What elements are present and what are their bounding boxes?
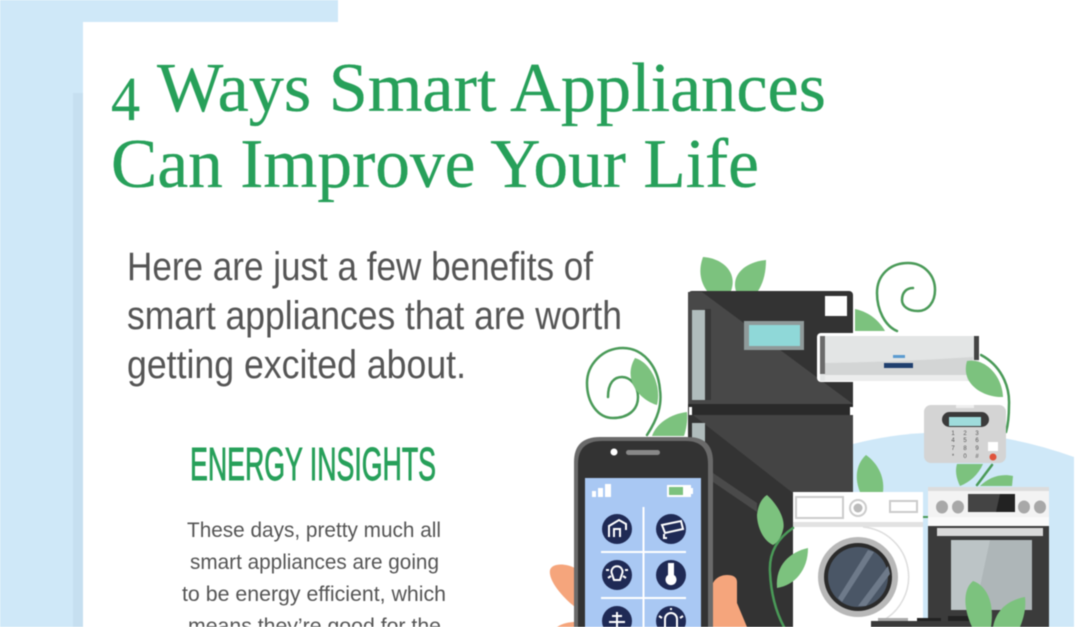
title: Can Improve Your Life xyxy=(111,126,759,203)
keypad digits: 8 xyxy=(963,446,967,452)
keypad digits: 6 xyxy=(975,438,979,444)
energy insights body text: to be energy efficient, which xyxy=(182,583,446,606)
washing machine xyxy=(793,492,928,627)
keypad digits: # xyxy=(975,454,979,460)
oven xyxy=(928,487,1049,627)
alarm panel xyxy=(924,405,1006,463)
blue hill background xyxy=(853,433,1074,627)
keypad digits: 3 xyxy=(975,431,979,437)
intro text: Here are just a few benefits of xyxy=(127,245,594,289)
keypad digits: 1 xyxy=(951,431,955,437)
energy insights body text: These days, pretty much all xyxy=(187,519,441,542)
signal and battery xyxy=(592,484,693,497)
app icons xyxy=(602,514,686,627)
title xyxy=(111,50,826,203)
keypad digits: 0 xyxy=(963,454,967,460)
energy insights body text xyxy=(182,519,446,627)
air conditioner xyxy=(817,333,980,382)
vines and leaves behind appliances xyxy=(587,257,1013,492)
keypad digits: 2 xyxy=(963,431,967,437)
illustration: smart appliances xyxy=(550,257,1074,627)
plant over washing machine xyxy=(757,495,808,627)
keypad digits: 7 xyxy=(951,446,955,452)
leaf over air conditioner xyxy=(966,361,1003,397)
title: Ways Smart Appliances xyxy=(157,50,826,127)
keypad digits: 5 xyxy=(963,438,967,444)
heading: energy insights: ENERGY INSIGHTS xyxy=(190,438,436,490)
keypad digits: 9 xyxy=(975,446,979,452)
plant in front of oven xyxy=(965,581,1025,627)
phone in hand xyxy=(550,437,747,627)
energy insights body text: smart appliances are going xyxy=(190,551,439,574)
intro text: getting excited about. xyxy=(127,343,466,387)
keypad digits: 4 xyxy=(951,438,955,444)
intro text xyxy=(127,245,622,387)
fridge xyxy=(688,291,853,627)
keypad digits xyxy=(951,431,979,460)
intro text: smart appliances that are worth xyxy=(127,294,622,338)
countertop items xyxy=(871,616,1019,627)
keypad digits: * xyxy=(952,454,955,460)
title: 4 xyxy=(111,66,140,134)
